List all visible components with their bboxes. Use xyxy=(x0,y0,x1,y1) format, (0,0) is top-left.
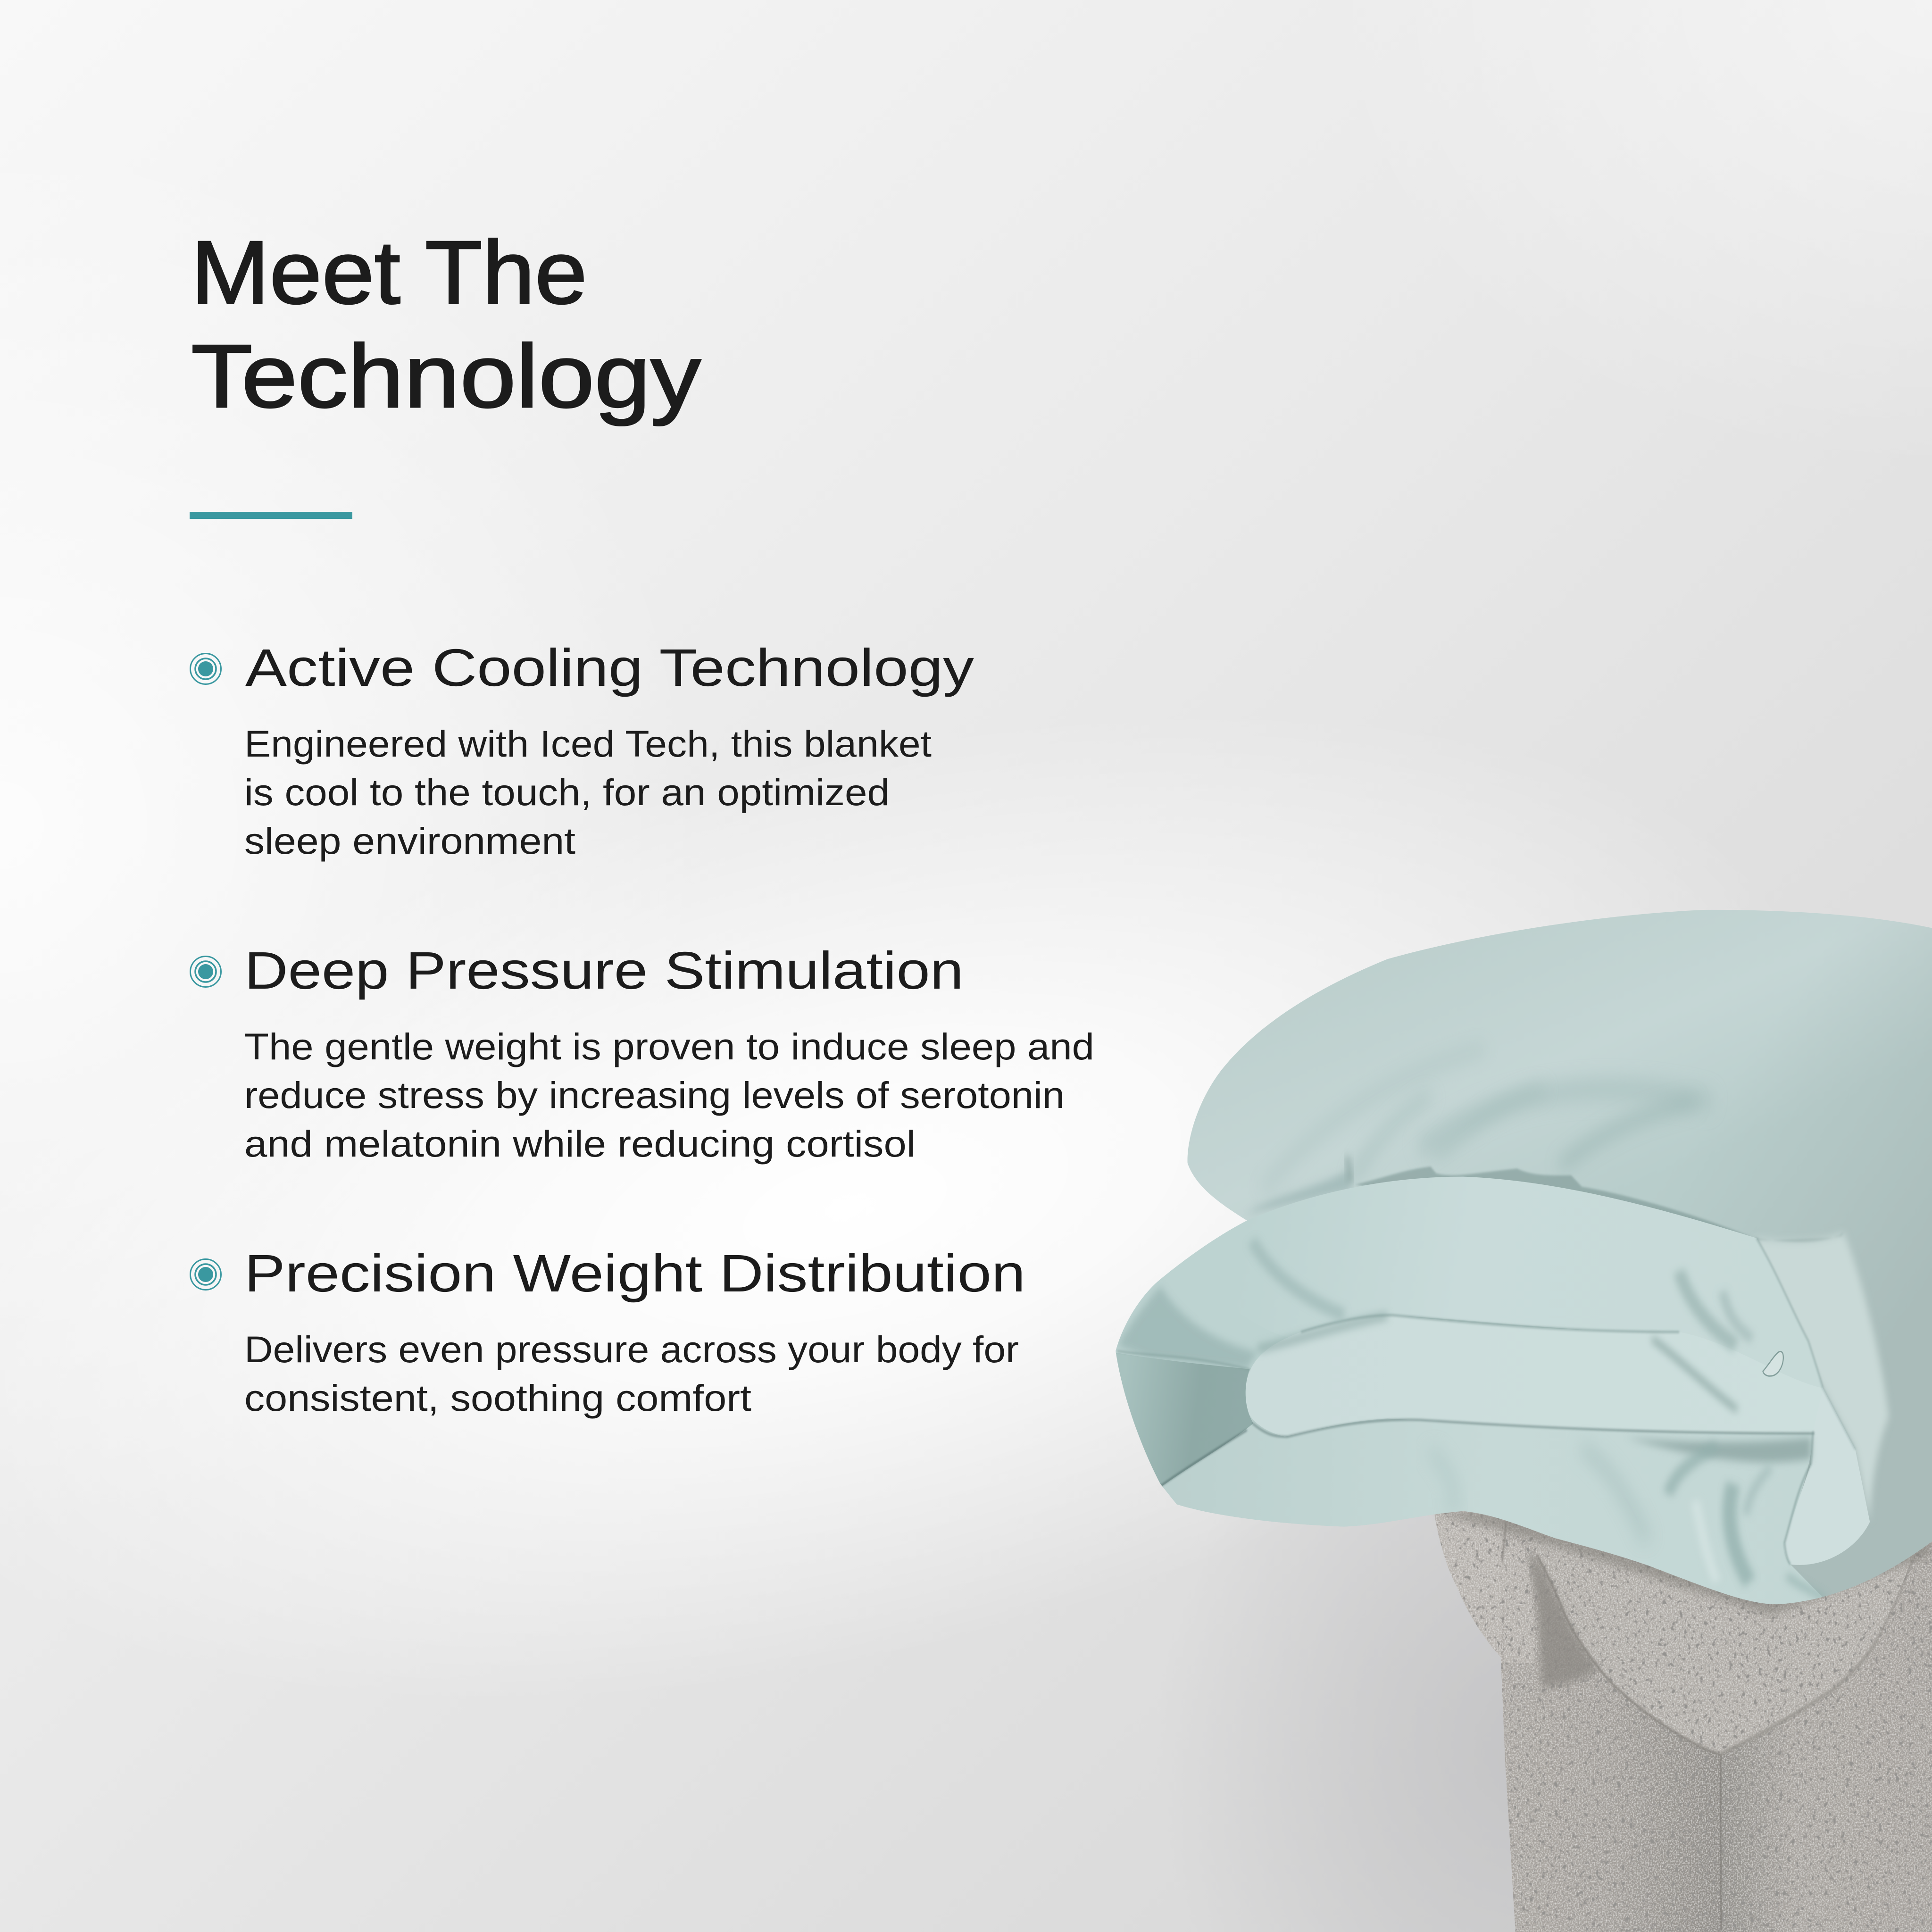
blanket: bottom fold xyxy=(1160,1420,1841,1616)
heading: Active Cooling Technology xyxy=(245,638,974,697)
concrete groove lines xyxy=(1431,1507,1931,1930)
icon: target bullet xyxy=(191,1259,221,1290)
icon: target bullet xyxy=(191,654,221,684)
description: consistent, soothing comfort xyxy=(244,1377,751,1419)
blanket: top roll xyxy=(1107,907,1932,1616)
description: sleep environment xyxy=(244,820,575,862)
title xyxy=(191,223,701,426)
blanket: left flap soft shadow xyxy=(1117,1286,1258,1369)
title: Meet The xyxy=(191,223,587,323)
feature: active cooling xyxy=(191,638,974,862)
description xyxy=(244,1025,1094,1165)
title accent rule xyxy=(190,512,352,519)
description: Engineered with Iced Tech, this blanket xyxy=(244,723,932,765)
feature list xyxy=(191,638,1094,1419)
wall shadow behind product xyxy=(1156,1321,1910,1932)
description: and melatonin while reducing cortisol xyxy=(244,1123,916,1165)
title: Technology xyxy=(191,326,701,426)
description: reduce stress by increasing levels of serotonin xyxy=(244,1074,1065,1116)
heading: Precision Weight Distribution xyxy=(244,1244,1025,1303)
concrete stand xyxy=(1431,1507,1932,1932)
blanket: right side drape xyxy=(1757,1232,1889,1522)
feature: precision weight xyxy=(191,1244,1025,1419)
blanket: fold pleats under the top roll xyxy=(1355,1166,1843,1243)
blanket xyxy=(1107,907,1932,1616)
blanket: left outer flap xyxy=(1107,1221,1387,1369)
blanket: inner fold xyxy=(1244,1315,1823,1437)
feature: deep pressure xyxy=(191,941,1094,1165)
concrete ridge shadow xyxy=(1529,1555,1598,1687)
blanket: inner opening shadow xyxy=(1107,1351,1253,1487)
blanket: middle fold xyxy=(1171,1177,1823,1433)
blanket: lower right light lobe xyxy=(1784,1388,1870,1565)
blanket: fold shadows and highlights xyxy=(1117,1238,1855,1599)
description: is cool to the touch, for an optimized xyxy=(244,771,890,813)
description xyxy=(244,1328,1019,1419)
description: Delivers even pressure across your body for xyxy=(244,1328,1019,1370)
product illustration: blanket on concrete stand xyxy=(1107,907,1932,1932)
heading: Deep Pressure Stimulation xyxy=(244,941,964,1000)
description xyxy=(244,723,932,862)
icon: target bullet xyxy=(191,957,221,987)
description: The gentle weight is proven to induce sleep and xyxy=(244,1025,1094,1067)
